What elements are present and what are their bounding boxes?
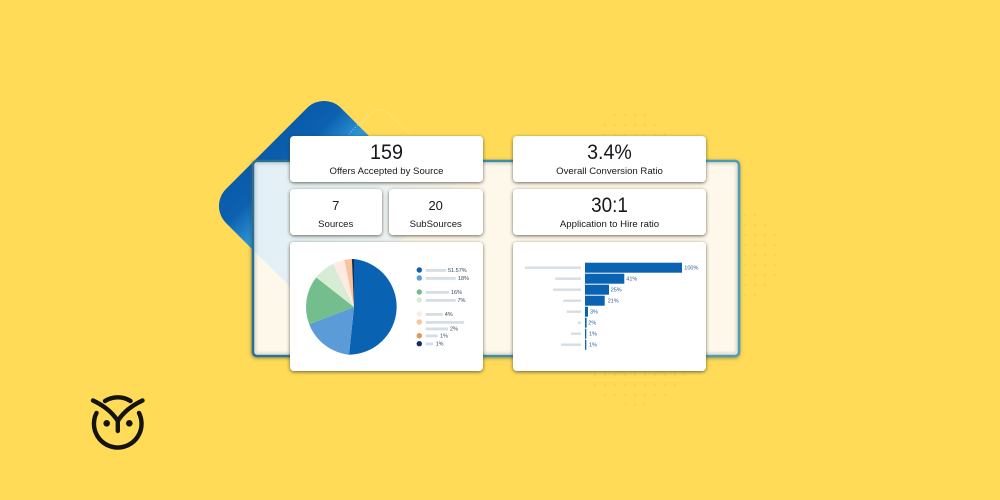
dotted highlight on diamond xyxy=(349,114,368,134)
pie legend: 4% xyxy=(445,312,453,318)
bar value labels: 1% xyxy=(589,332,597,338)
faint outline behind diamond xyxy=(352,110,412,136)
card: pie chart xyxy=(290,242,483,371)
card: subsources: 20 xyxy=(428,198,443,213)
pie legend: 16% xyxy=(451,290,462,296)
blue diamond backdrop xyxy=(209,91,439,321)
pie legend: 18% xyxy=(458,276,469,282)
card: application to hire xyxy=(513,189,706,235)
pie legend: 1% xyxy=(436,342,444,348)
bar value labels: 100% xyxy=(684,266,698,272)
bar value labels: 2% xyxy=(588,321,596,327)
card: application to hire: Application to Hire ratio xyxy=(560,219,659,230)
card: bar chart xyxy=(513,242,706,371)
pie legend: 51.57% xyxy=(448,268,467,274)
card: conversion ratio: Overall Conversion Ratio xyxy=(556,166,663,177)
card: application to hire: 30:1 xyxy=(591,193,628,217)
bar value labels xyxy=(588,266,698,349)
bars xyxy=(585,263,682,350)
bar category placeholders xyxy=(525,266,581,346)
bar value labels: 25% xyxy=(611,288,622,294)
card: subsources: SubSources xyxy=(410,219,462,230)
card: offers accepted: 159 xyxy=(370,140,403,164)
bar value labels: 41% xyxy=(626,277,637,283)
card: sources xyxy=(290,189,382,235)
card: offers accepted: Offers Accepted by Source xyxy=(330,166,443,177)
pie legend: 1% xyxy=(440,334,448,340)
bar value labels: 3% xyxy=(590,310,598,316)
dotted pattern: top xyxy=(596,108,668,192)
card: offers accepted xyxy=(290,136,483,182)
card: subsources xyxy=(389,189,483,235)
bar value labels: 1% xyxy=(589,343,597,349)
panel tint from diamond xyxy=(254,162,442,286)
pie chart xyxy=(306,259,397,355)
pie legend xyxy=(417,267,469,348)
card: conversion ratio xyxy=(513,136,706,182)
panel inner shading xyxy=(254,162,738,354)
icon: owl logo xyxy=(93,397,142,448)
dotted pattern: bottom xyxy=(584,314,688,406)
card: sources: Sources xyxy=(318,219,353,230)
bar value labels: 21% xyxy=(608,299,619,305)
card: conversion ratio: 3.4% xyxy=(587,140,632,164)
pie legend: 2% xyxy=(450,327,458,333)
large dashboard panel xyxy=(253,161,739,356)
card: sources: 7 xyxy=(332,198,339,213)
pie legend: 7% xyxy=(458,298,466,304)
dotted pattern: right xyxy=(703,211,781,299)
